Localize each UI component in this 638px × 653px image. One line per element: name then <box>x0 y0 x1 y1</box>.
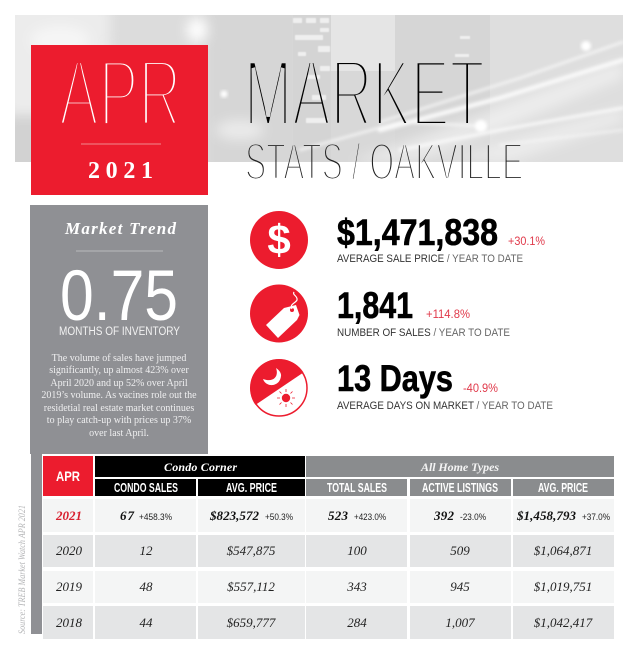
trend paragraph <box>41 353 197 439</box>
table <box>42 454 616 641</box>
table row: 2019: 343 <box>346 579 367 594</box>
trend paragraph: over last April. <box>89 428 149 439</box>
month APR: APR <box>59 39 181 146</box>
table row: 2018: 284 <box>347 615 367 630</box>
table row: 2020: $547,875 <box>227 543 276 558</box>
table row: 2018: 2018 <box>56 615 82 630</box>
subtitle STATS / OAKVILLE: STATS / OAKVILLE <box>245 134 523 192</box>
red date box <box>31 39 208 195</box>
table header: condo corner: AVG. PRICE <box>226 480 277 495</box>
table row: 2021: $823,572 <box>209 508 260 523</box>
panel: market trend <box>30 205 208 634</box>
stat: number of sales <box>337 285 510 339</box>
table header: condo corner: CONDO SALES <box>114 480 178 495</box>
figure 0.75: 0.75 <box>60 257 178 336</box>
table row: 2021: $1,458,793 <box>516 508 576 523</box>
table header: all home types: All Home Types <box>420 460 499 474</box>
stat: number of sales: +114.8% <box>426 309 470 321</box>
source note: Source: TREB Market Watch APR 2021 <box>17 505 27 634</box>
stat: days on market: AVERAGE DAYS ON MARKET / YEAR TO DATE <box>337 400 553 412</box>
table header: condo corner <box>95 456 305 496</box>
icon: dollar: $ <box>267 216 291 263</box>
background photo banner <box>15 15 623 162</box>
stat: days on market: 13 Days <box>337 358 453 399</box>
table row: 2020: 509 <box>450 543 470 558</box>
table row: 2019: 945 <box>450 579 470 594</box>
table row: 2021: 67 <box>120 508 134 523</box>
table header: all home types: TOTAL SALES <box>327 480 387 495</box>
table row: 2018: $659,777 <box>227 615 276 630</box>
table header: all home types <box>306 456 614 496</box>
table row: 2021: +37.0% <box>582 512 610 523</box>
heading Market Trend: Market Trend <box>64 219 176 238</box>
table row: 2018: $1,042,417 <box>534 615 593 630</box>
table header: condo corner: Condo Corner <box>164 460 237 474</box>
table row: 2019 <box>43 571 614 603</box>
table row: 2020: 100 <box>347 543 367 558</box>
stat: days on market: -40.9% <box>463 383 498 395</box>
table row: 2019: 2019 <box>56 579 82 594</box>
table row: 2020 <box>43 535 614 567</box>
icon: day and night <box>250 359 308 417</box>
year 2021: 2021 <box>88 158 153 184</box>
table row: 2021: -23.0% <box>460 512 486 523</box>
table row: 2020: 12 <box>140 543 153 558</box>
table header: all home types: AVG. PRICE <box>538 480 588 495</box>
table cell: APR: APR <box>56 468 80 484</box>
stat: number of sales: 1,841 <box>337 285 413 326</box>
table row: 2021: +50.3% <box>265 512 293 523</box>
months of inventory label: MONTHS OF INVENTORY <box>59 326 180 338</box>
table row: 2021: +458.3% <box>139 512 172 523</box>
table row: 2019: 48 <box>140 579 153 594</box>
table row: 2020: $1,064,871 <box>534 543 592 558</box>
table row: 2021: 523 <box>328 508 348 523</box>
stat: average sale price: AVERAGE SALE PRICE / YEAR TO DATE <box>337 253 523 265</box>
table row: 2018: 44 <box>140 615 153 630</box>
table row: 2021: 2021 <box>55 508 82 523</box>
stat: average sale price: $1,471,838 <box>337 212 498 253</box>
stat: average sale price: +30.1% <box>508 236 545 248</box>
table row: 2019: $557,112 <box>227 579 275 594</box>
table row: 2020: 2020 <box>56 543 82 558</box>
trend paragraph: The volume of sales have jumped <box>52 353 186 364</box>
stat: average sale price <box>337 212 545 265</box>
trend paragraph: residetial real estate market continues <box>44 403 194 414</box>
stat: number of sales: NUMBER OF SALES / YEAR TO DATE <box>337 327 510 339</box>
trend paragraph: significantly, up almost 423% over <box>49 365 189 376</box>
table cell: APR <box>43 456 93 496</box>
trend paragraph: April 2020 and up 52% over April <box>50 378 188 389</box>
icon: price tag <box>250 284 308 342</box>
trend paragraph: 2019’s volume. As vacines role out the <box>41 390 197 401</box>
icon: dollar <box>250 211 308 269</box>
title MARKET: MARKET <box>244 39 485 147</box>
trend paragraph: to play catch-up with prices up 37% <box>47 415 191 426</box>
table row: 2018 <box>43 606 614 639</box>
table row: 2018: 1,007 <box>445 615 475 630</box>
table row: 2021: 392 <box>433 508 454 523</box>
table row: 2021 <box>43 499 614 532</box>
stat: days on market <box>337 358 553 412</box>
table row: 2021: +423.0% <box>354 512 386 523</box>
table row: 2019: $1,019,751 <box>534 579 592 594</box>
table header: all home types: ACTIVE LISTINGS <box>422 480 498 495</box>
